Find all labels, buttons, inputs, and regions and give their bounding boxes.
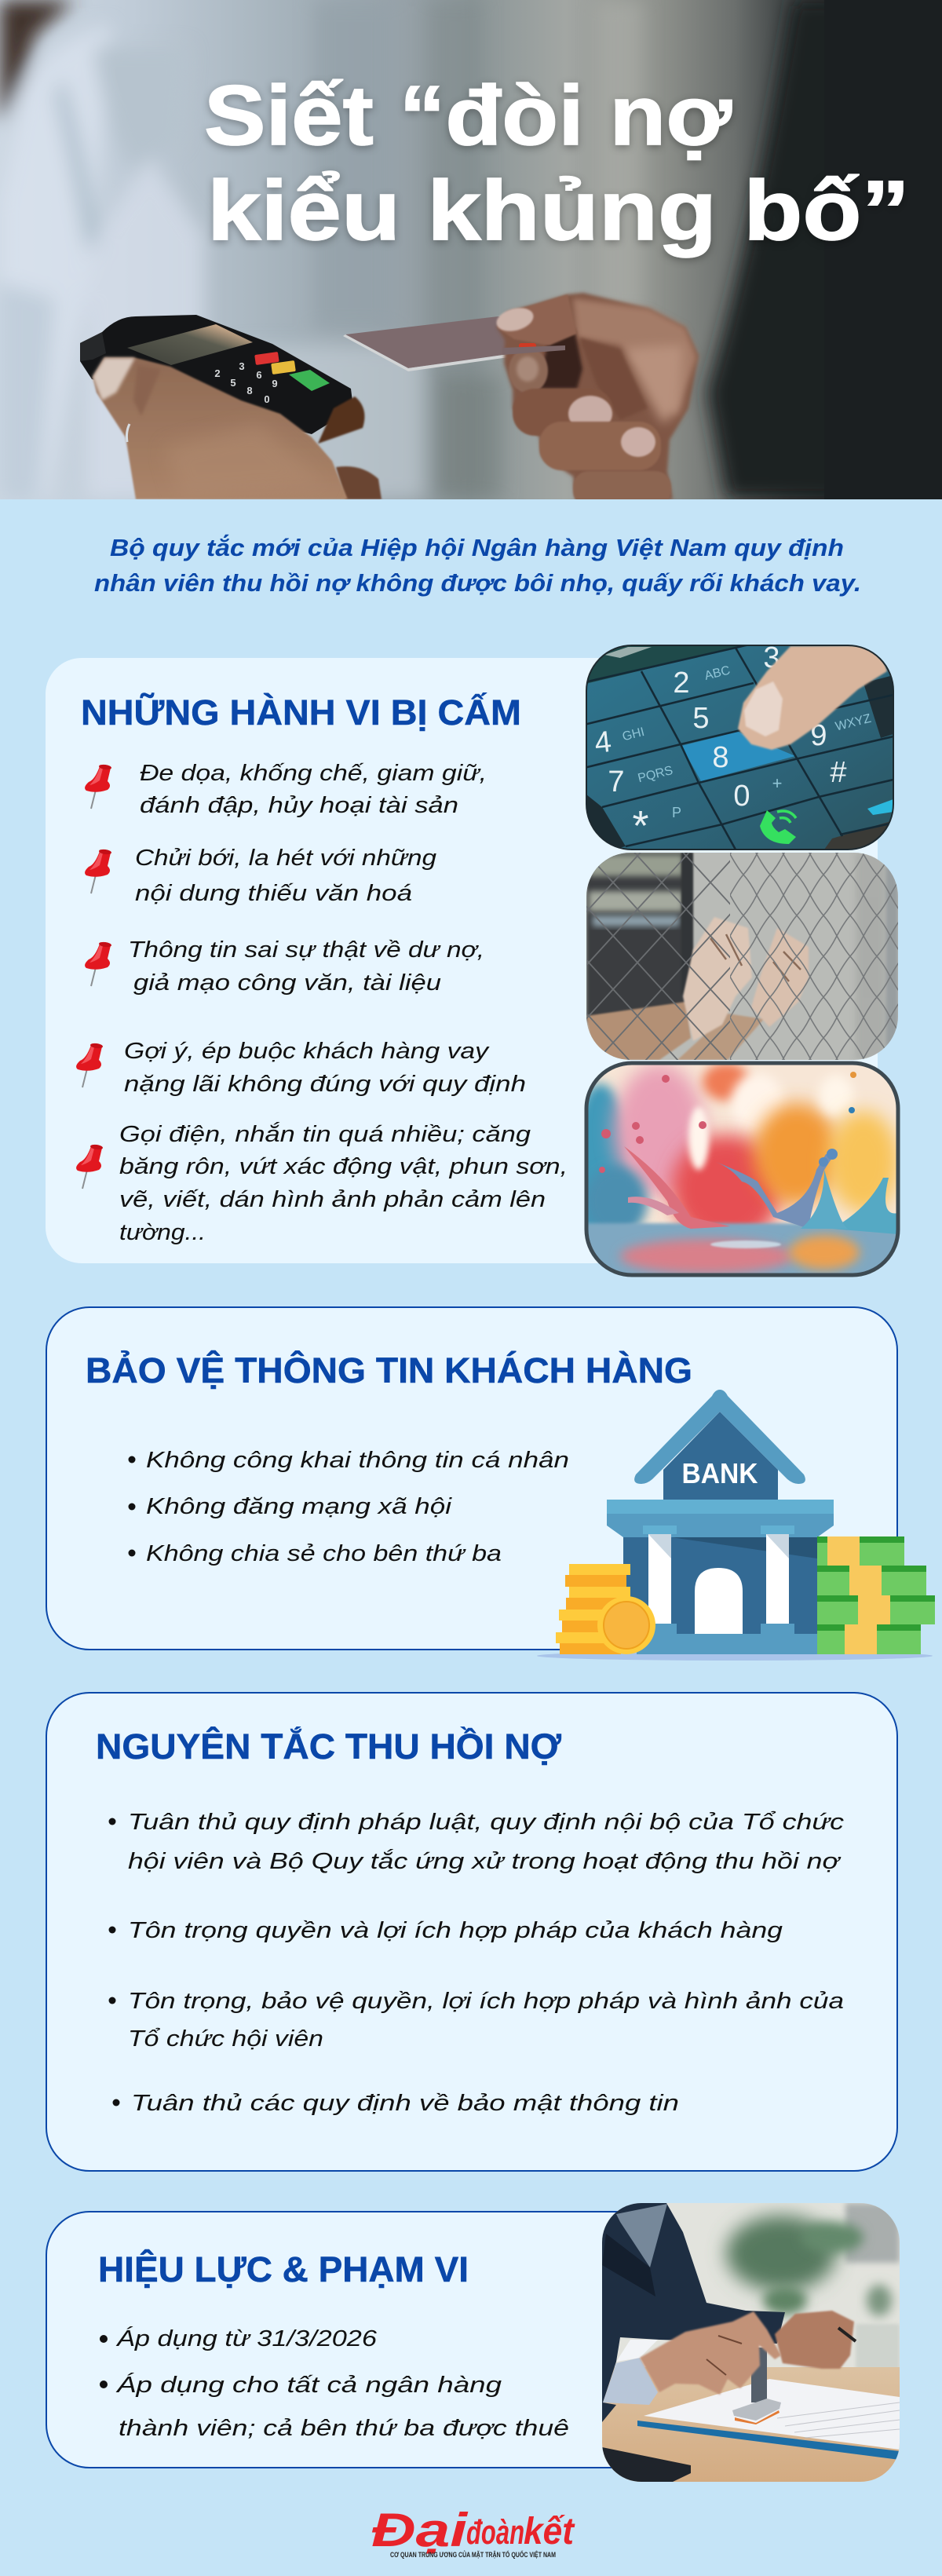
logo: Đại đoàn kết: đoàn bbox=[466, 2513, 524, 2552]
photo: phone keypad: 0 bbox=[733, 780, 750, 813]
title: kiểu khủng bố” bbox=[207, 163, 910, 258]
subtitle: nhân viên thu hồi nợ không được bôi nhọ, quấy rối khách vay. bbox=[94, 569, 861, 597]
photo: phone keypad: 5 bbox=[692, 702, 710, 735]
bullet list: scope: thành viên; cả bên thứ ba được thuê bbox=[119, 2416, 569, 2441]
photo: hands behind fence bbox=[586, 853, 898, 1060]
stamp bbox=[751, 2348, 767, 2402]
bullet list: principles: Tổ chức hội viên bbox=[128, 2026, 323, 2052]
panel: prohibited behaviours bbox=[46, 658, 878, 1263]
illustration: bank with coins and cash bbox=[537, 1390, 935, 1661]
icon: gold coins bbox=[556, 1564, 655, 1654]
bullet list: information rules: Không công khai thông tin cá nhân bbox=[146, 1448, 569, 1473]
item 1 bbox=[85, 761, 487, 818]
payment terminal: 0 bbox=[264, 393, 270, 405]
payment terminal: 3 bbox=[239, 360, 245, 372]
bullet list: principles: hội viên và Bộ Quy tắc ứng xử trong hoạt động thu hồi nợ bbox=[128, 1848, 842, 1874]
photo: hand stamping a document bbox=[602, 2203, 900, 2482]
photo: phone keypad: # bbox=[830, 756, 847, 789]
item 5 bbox=[76, 1121, 568, 1245]
bullet list: principles: Tôn trọng quyền và lợi ích hợp pháp của khách hàng bbox=[128, 1918, 783, 1943]
payment terminal: 5 bbox=[230, 377, 236, 389]
item 5: Gọi điện, nhắn tin quá nhiều; căng bbox=[119, 1121, 531, 1147]
photo: phone keypad: 8 bbox=[712, 741, 729, 774]
photo: phone keypad: * bbox=[632, 802, 649, 850]
item 2: nội dung thiếu văn hoá bbox=[135, 881, 412, 906]
bullet list: principles: Tuân thủ các quy định về bảo mật thông tin bbox=[131, 2091, 679, 2116]
bullet list: information rules: Không đăng mạng xã hội bbox=[146, 1494, 453, 1519]
blurred shirt folds bbox=[0, 0, 644, 499]
photo: phone keypad: WXYZ bbox=[834, 712, 873, 733]
item 3 bbox=[85, 937, 484, 996]
payment terminal bbox=[80, 315, 353, 434]
logo: Đại đoàn kết: kết bbox=[524, 2511, 575, 2552]
panel: debt collection principles bbox=[46, 1693, 897, 2171]
photo: phone keypad: ABC bbox=[703, 663, 732, 683]
hero photo: card payment bbox=[0, 0, 942, 506]
icon: stack of cash bbox=[817, 1536, 935, 1654]
payment terminal: 2 bbox=[214, 367, 221, 379]
item 4: nặng lãi không đúng với quy định bbox=[124, 1072, 526, 1097]
item 1: đánh đập, hủy hoại tài sản bbox=[140, 793, 458, 818]
photo: phone keypad bbox=[581, 636, 893, 850]
item 5: vẽ, viết, dán hình ảnh phản cảm lên bbox=[119, 1187, 546, 1212]
heading: debt collection principles: NGUYÊN TẮC THU HỒI NỢ bbox=[96, 1726, 562, 1767]
subtitle: Bộ quy tắc mới của Hiệp hội Ngân hàng Việt Nam quy định bbox=[110, 533, 844, 561]
icon: bank building bbox=[607, 1390, 834, 1654]
photo: phone keypad: + bbox=[772, 773, 782, 793]
photo: phone keypad: 4 bbox=[593, 725, 613, 760]
item 1: Đe dọa, khống chế, giam giữ, bbox=[140, 761, 487, 786]
item 4: Gợi ý, ép buộc khách hàng vay bbox=[124, 1039, 490, 1064]
photo: phone keypad: PQRS bbox=[637, 764, 674, 785]
logo tagline: CƠ QUAN TRUNG ƯƠNG CỦA MẶT TRẬN TỔ QUỐC VIỆT NAM bbox=[390, 2550, 556, 2559]
logo: Đại đoàn kết bbox=[371, 2504, 575, 2556]
panel: protecting customer information bbox=[46, 1307, 897, 1650]
item 2 bbox=[85, 846, 436, 906]
item 4 bbox=[76, 1039, 526, 1097]
photo: phone keypad: P bbox=[672, 805, 681, 820]
heading: prohibited behaviours: NHỮNG HÀNH VI BỊ CẤM bbox=[81, 692, 521, 733]
card bbox=[345, 316, 506, 368]
panel: effect and scope bbox=[46, 2212, 831, 2468]
bullet list: information rules: Không chia sẻ cho bên thứ ba bbox=[146, 1541, 502, 1566]
payment terminal: 6 bbox=[256, 369, 262, 381]
payment terminal: 8 bbox=[246, 385, 253, 396]
bullet list: principles bbox=[108, 1810, 845, 2116]
photo: paint splash bbox=[571, 1063, 899, 1278]
photo: phone keypad: 3 bbox=[763, 641, 780, 674]
bullet list: information rules bbox=[129, 1448, 569, 1566]
bullet list: scope: Áp dụng cho tất cả ngân hàng bbox=[115, 2372, 502, 2398]
hand on stamp bbox=[640, 2311, 781, 2395]
icon: bank building: BANK bbox=[681, 1457, 758, 1489]
left hand holding terminal bbox=[93, 357, 382, 499]
paper and folder bbox=[644, 2379, 900, 2450]
bullet list: principles: Tôn trọng, bảo vệ quyền, lợi ích hợp pháp và hình ảnh của bbox=[128, 1989, 844, 2014]
photo: phone keypad: GHI bbox=[621, 725, 646, 744]
item 2: Chửi bới, la hét với những bbox=[135, 846, 436, 871]
photo: phone keypad: 2 bbox=[673, 667, 690, 700]
bullet list: scope: Áp dụng từ 31/3/2026 bbox=[115, 2326, 378, 2351]
photo: phone keypad: 9 bbox=[810, 719, 827, 752]
shirt cuff bbox=[603, 2358, 658, 2405]
bullet list: principles: Tuân thủ quy định pháp luật, quy định nội bộ của Tổ chức bbox=[128, 1810, 845, 1835]
item 3: giả mạo công văn, tài liệu bbox=[133, 970, 441, 996]
subtitle bbox=[94, 533, 861, 597]
logo: Đại đoàn kết: Đại bbox=[371, 2504, 469, 2556]
title bbox=[204, 68, 910, 258]
heading: effect and scope: HIỆU LỰC & PHẠM VI bbox=[98, 2249, 469, 2289]
item 5: tường... bbox=[119, 1220, 206, 1245]
title: Siết “đòi nợ bbox=[204, 68, 732, 163]
bullet list: scope bbox=[100, 2326, 569, 2441]
item 5: băng rôn, vứt xác động vật, phun sơn, bbox=[119, 1154, 568, 1179]
item 3: Thông tin sai sự thật về dư nợ, bbox=[128, 937, 484, 963]
suit bbox=[602, 2203, 785, 2422]
photo: phone keypad: 7 bbox=[608, 765, 625, 798]
payment terminal: 9 bbox=[272, 378, 278, 389]
arms and fists bbox=[586, 917, 809, 1060]
other hand with pen bbox=[775, 2311, 854, 2369]
call icon bbox=[760, 810, 796, 844]
right hand bbox=[494, 293, 699, 506]
heading: protecting customer information: BẢO VỆ THÔNG TIN KHÁCH HÀNG bbox=[86, 1350, 692, 1390]
